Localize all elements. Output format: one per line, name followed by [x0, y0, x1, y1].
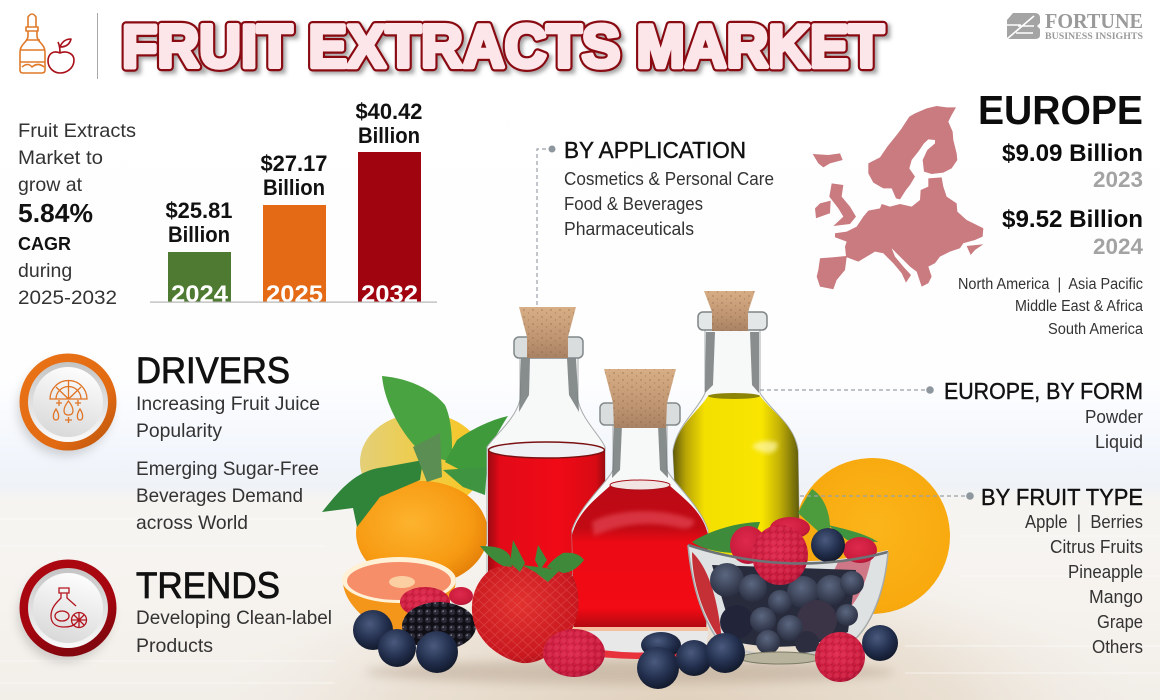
bar 2024: $25.81 [166, 198, 232, 223]
panel: Europe figures: South America [1048, 321, 1143, 338]
title: FRUIT EXTRACTS MARKET [125, 16, 887, 83]
panel: Europe by form: Powder [1085, 407, 1143, 427]
text block: market growth: 2025-2032 [18, 287, 117, 309]
logo: Fortune Business Insights [1007, 9, 1143, 42]
contact shadow [365, 660, 895, 684]
text block: drivers list: Popularity [136, 420, 222, 442]
text block: market growth: 5.84% [18, 198, 93, 228]
panel: by application: Cosmetics & Personal Care [564, 169, 774, 189]
panel: Europe figures: EUROPE [978, 87, 1143, 133]
red bottle left [487, 307, 605, 575]
bar chart: market size [150, 99, 437, 308]
panel: Europe figures: 2024 [1093, 234, 1144, 259]
bar 2025: $27.17 [260, 151, 328, 176]
bar 2024: 2024 [171, 281, 229, 308]
bar 2032: $40.42 [356, 99, 422, 124]
right lemon [772, 436, 972, 636]
panel: by fruit type: BY FRUIT TYPE [981, 484, 1143, 510]
panel: Europe by form: EUROPE, BY FORM [944, 378, 1143, 404]
text block: drivers list: Emerging Sugar-Free [136, 458, 319, 480]
text block: drivers list: Increasing Fruit Juice [136, 393, 320, 415]
panel: Europe by form [760, 378, 1143, 452]
orange left [356, 481, 488, 585]
text block: market growth: Market to [18, 147, 103, 169]
bar 2032: Billion [358, 123, 420, 148]
map: Europe [813, 106, 983, 289]
lemon behind left [360, 413, 484, 511]
panel: by application: Pharmaceuticals [564, 219, 694, 239]
text block: market growth: Fruit Extracts [18, 120, 136, 142]
panel: by application [537, 137, 774, 305]
strawberry [472, 540, 584, 663]
icon: trends badge [18, 560, 116, 662]
panel: by fruit type: Others [1092, 637, 1143, 657]
mint leaves left [322, 376, 508, 527]
panel: by fruit type: Mango [1089, 587, 1143, 607]
icon: bottle and apple [20, 14, 74, 73]
bar 2024: Billion [168, 222, 230, 247]
bar 2025: Billion [263, 175, 325, 200]
title: FRUIT EXTRACTS MARKET [122, 13, 884, 80]
bowl glass [688, 545, 888, 645]
icon: drivers badge [18, 354, 116, 456]
heading: trends: TRENDS [136, 565, 280, 606]
berries in bowl [710, 563, 864, 655]
panel: by application: BY APPLICATION [564, 137, 746, 163]
text block: market growth: CAGR [18, 234, 71, 254]
title: FRUIT EXTRACTS MARKET [122, 13, 884, 80]
panel: Europe figures [958, 87, 1144, 338]
panel: Europe figures: North America | Asia Pacific [958, 276, 1143, 293]
text block: market growth: during [18, 260, 72, 282]
yellow oil bottle [673, 291, 800, 590]
red bottle centre [572, 369, 708, 659]
bar 2032: 2032 [361, 281, 418, 308]
photo: fruit extract bottles and fruits [322, 291, 972, 689]
raspberries behind [400, 587, 473, 617]
logo: Fortune Business Insights: FORTUNE [1045, 9, 1143, 33]
text block: market growth: grow at [18, 174, 83, 196]
logo: Fortune Business Insights: BUSINESS INSIGHTS [1045, 32, 1143, 42]
text block: drivers list: Beverages Demand [136, 485, 303, 507]
panel: Europe figures: $9.52 Billion [1002, 206, 1143, 233]
panel: Europe figures: 2023 [1093, 167, 1143, 192]
bowl with berries [688, 489, 888, 664]
panel: by fruit type [800, 484, 1143, 657]
blueberries left [353, 610, 458, 673]
panel: Europe figures: $9.09 Billion [1002, 140, 1143, 167]
panel: by fruit type: Pineapple [1068, 562, 1143, 582]
heading: drivers: DRIVERS [136, 350, 290, 391]
text block: trends list: Developing Clean-label [136, 607, 332, 629]
blackberry [402, 602, 476, 650]
text block: market growth [18, 120, 136, 309]
mint in bowl [692, 489, 878, 553]
panel: Europe figures: Middle East & Africa [1015, 298, 1143, 315]
panel: Europe by form: Liquid [1095, 432, 1143, 452]
raspberry front [543, 629, 605, 677]
panel: by fruit type: Apple | Berries [1025, 512, 1143, 532]
text block: drivers list: across World [136, 512, 248, 534]
panel: by fruit type: Citrus Fruits [1050, 537, 1143, 557]
raspberry bowl front [815, 632, 865, 682]
citrus half [342, 557, 456, 631]
panel: by application: Food & Beverages [564, 194, 703, 214]
text block: trends list: Products [136, 635, 213, 657]
bar 2024 [166, 198, 232, 308]
bar 2025 [260, 151, 328, 308]
bar 2025: 2025 [266, 281, 323, 308]
bar 2032 [356, 99, 422, 308]
text block: drivers list [136, 393, 320, 534]
panel: by fruit type: Grape [1097, 612, 1143, 632]
text block: trends list [136, 607, 332, 657]
blueberries right [637, 625, 898, 689]
